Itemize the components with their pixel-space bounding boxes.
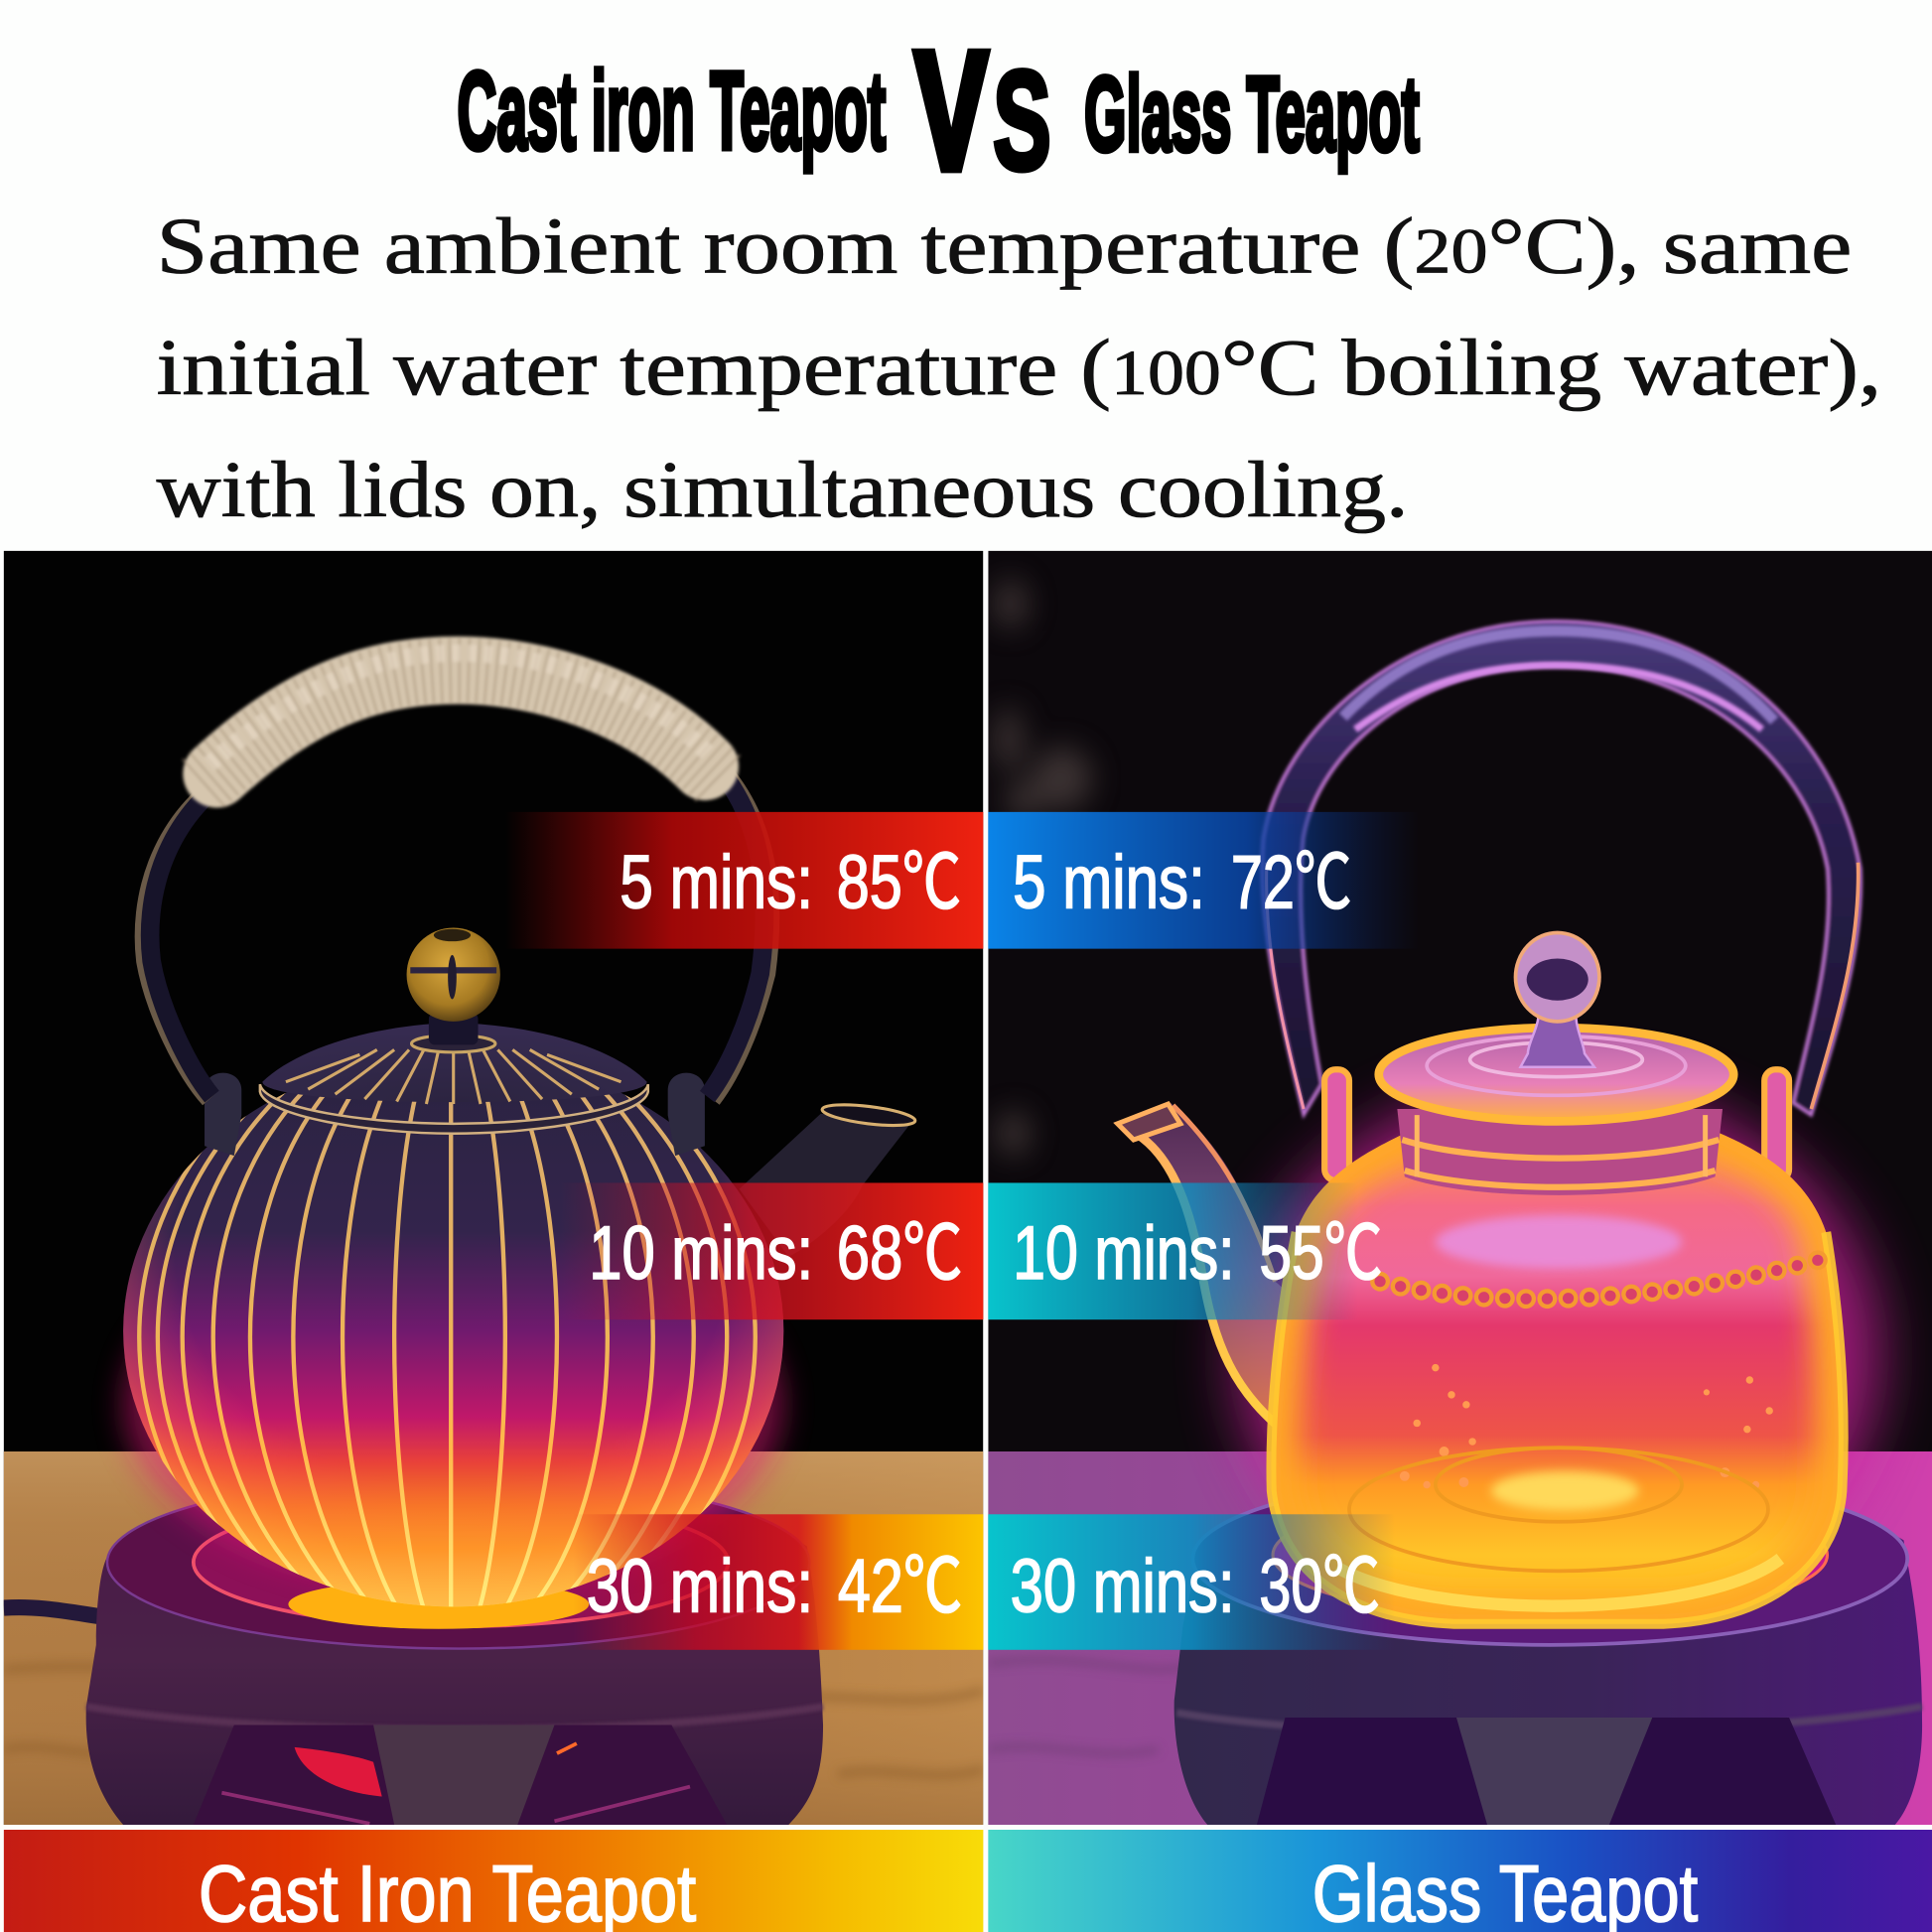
glass handle — [1262, 621, 1861, 1115]
bubble ring — [1380, 1259, 1821, 1299]
label: cast iron 30 mins: 42℃ — [838, 1544, 962, 1628]
label: glass 5 mins — [988, 812, 1420, 949]
label: glass 30 mins — [988, 1514, 1395, 1650]
title — [457, 19, 1420, 204]
description text: with lids on, simultaneous cooling. — [157, 446, 1409, 534]
label: glass 5 mins: 5 mins: — [1013, 841, 1205, 925]
title: glass teapot: Glass Teapot — [1084, 54, 1420, 173]
description text: initial water temperature ( 100°C boiling water), — [157, 324, 1881, 412]
teapot spout — [740, 1101, 916, 1257]
label: cast iron 5 mins — [505, 812, 983, 949]
description text: Same ambient room temperature ( 20°C), same — [157, 202, 1852, 290]
title: Cast iron Teapot — [457, 49, 886, 173]
label: glass 10 mins: 10 mins: — [1013, 1211, 1235, 1296]
teapot metal handle — [144, 770, 770, 1099]
pot base rings — [1349, 1448, 1768, 1571]
lid — [260, 1023, 648, 1134]
glass lugs — [1324, 1069, 1789, 1180]
warm edge glow — [1271, 1128, 1844, 1624]
wooden table — [4, 1451, 983, 1825]
teapot side lugs — [205, 1073, 705, 1156]
label: glass 10 mins: 55℃ — [1259, 1211, 1382, 1296]
glass neck — [1397, 1109, 1723, 1195]
pink water surface — [1436, 1215, 1682, 1269]
pink table — [988, 1451, 1932, 1825]
yellow base plate — [288, 1587, 590, 1629]
label: cast iron 5 mins: 5 mins: — [620, 841, 813, 925]
electric stove — [86, 1476, 823, 1825]
body glow — [105, 1338, 802, 1590]
label: glass 30 mins: 30℃ — [1259, 1544, 1380, 1628]
label: glass 10 mins — [988, 1182, 1382, 1319]
panel: cast iron teapot photo — [4, 551, 983, 1825]
label: cast iron 30 mins: 30 mins: — [587, 1544, 813, 1628]
panel: glass teapot photo — [988, 551, 1932, 1825]
label: cast iron 10 mins: 10 mins: — [589, 1211, 813, 1296]
stove central leg — [1456, 1718, 1658, 1825]
knob — [407, 928, 500, 1052]
stove central leg — [373, 1725, 557, 1825]
glass lid — [1379, 1028, 1733, 1121]
rope-wrapped handle grip — [204, 653, 719, 783]
power cord — [4, 1607, 101, 1616]
title: VS: V — [915, 19, 987, 204]
glass knob — [1516, 932, 1599, 1067]
stove vent openings — [194, 1725, 727, 1825]
label: cast iron 10 mins: 68℃ — [837, 1211, 962, 1296]
heat glow — [1193, 1080, 1924, 1505]
teapot body with gold stripes — [123, 1092, 784, 1606]
panel divider — [983, 551, 988, 1830]
glass body — [1271, 1128, 1844, 1624]
background bokeh — [993, 579, 1092, 1156]
glass spout — [1113, 1101, 1282, 1427]
rising bubbles — [1400, 1364, 1773, 1488]
footer: glass teapot — [988, 1830, 1932, 1932]
label: glass 30 mins: 30 mins: — [1011, 1544, 1235, 1628]
description text — [157, 202, 1881, 534]
stove vent openings — [1257, 1718, 1836, 1825]
footer: cast iron teapot — [4, 1830, 983, 1932]
label: cast iron 5 mins: 85℃ — [837, 841, 961, 925]
electric stove — [1174, 1472, 1922, 1825]
title: VS: S — [993, 42, 1051, 199]
label: cast iron 30 mins — [573, 1514, 983, 1650]
label: glass 5 mins: 72℃ — [1231, 841, 1351, 925]
label: cast iron 10 mins — [561, 1182, 983, 1319]
